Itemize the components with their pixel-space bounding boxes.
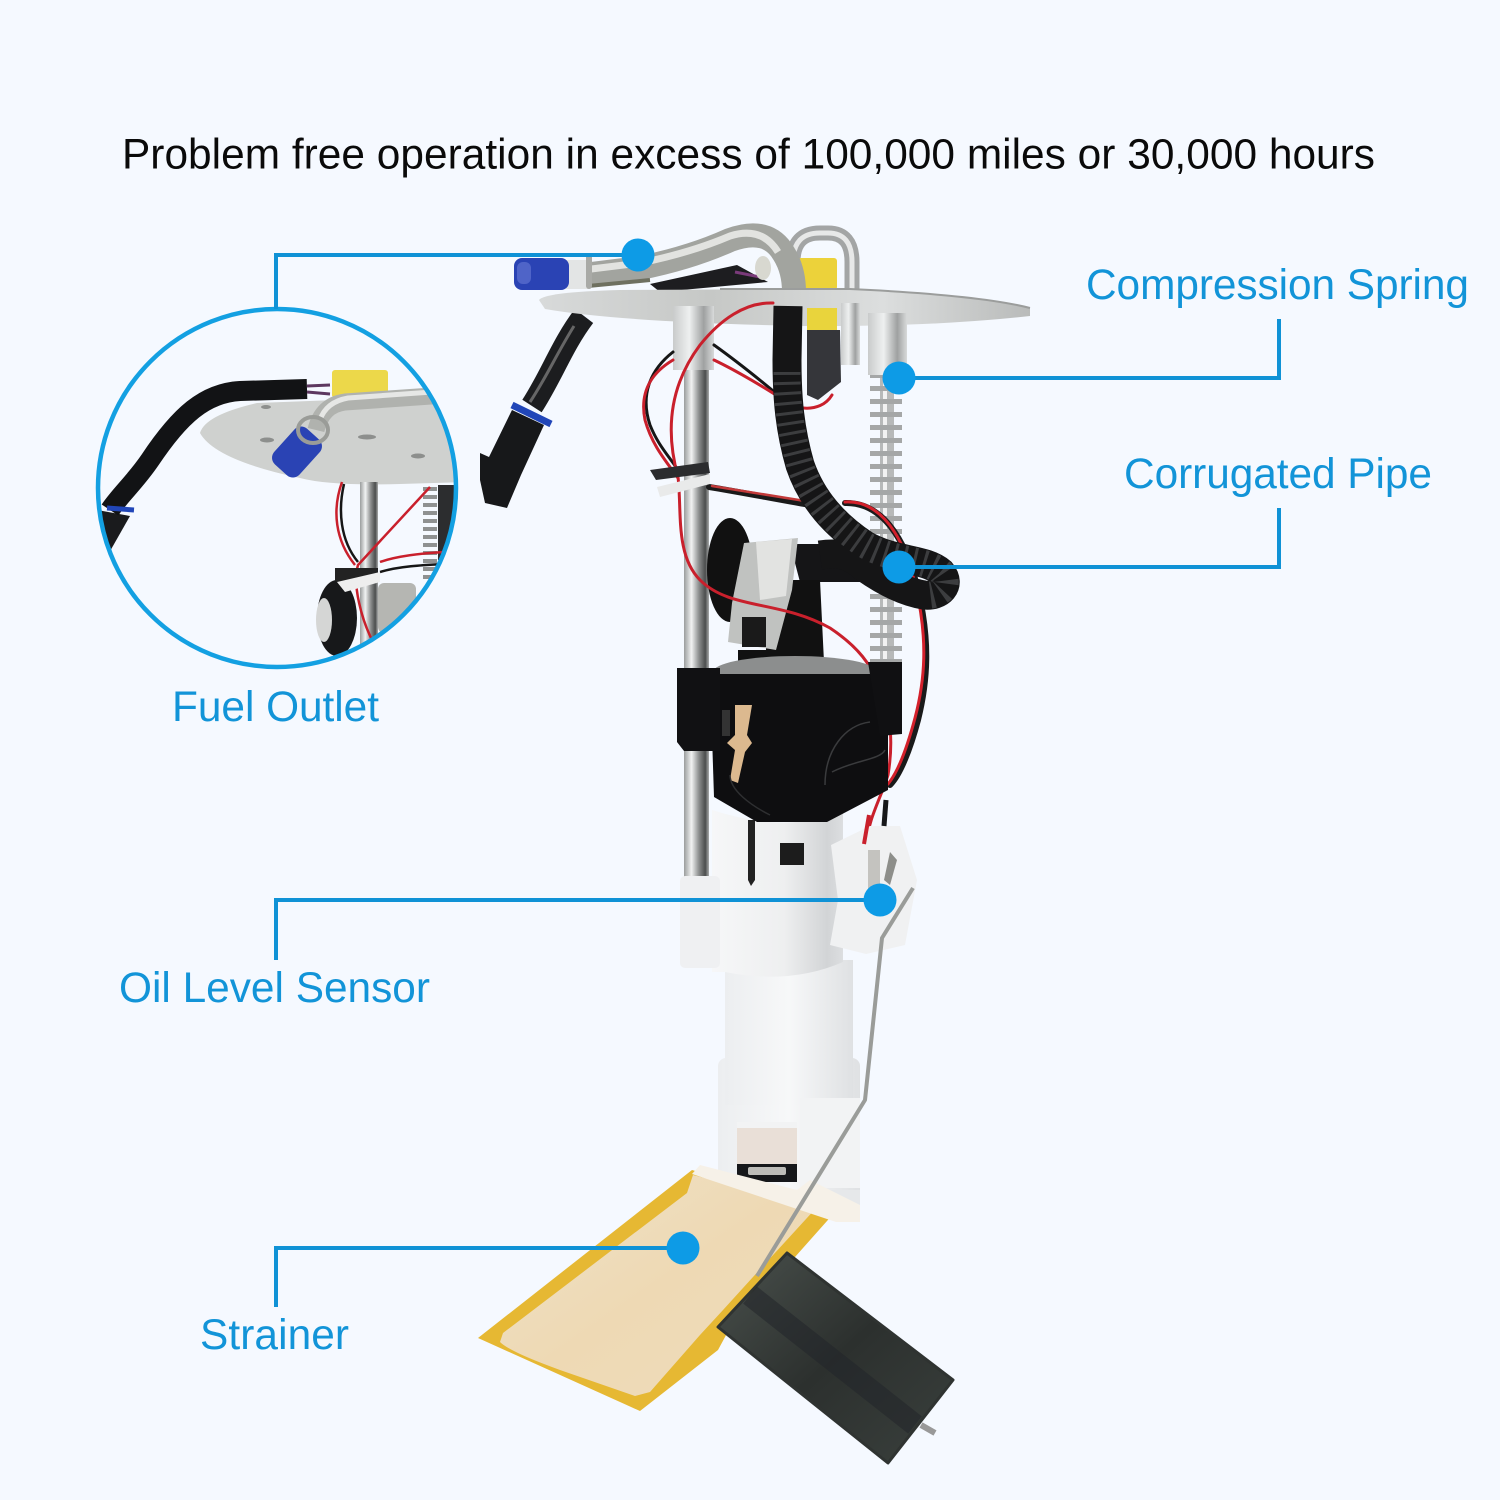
- label: corrugated pipe: Corrugated Pipe: [1124, 450, 1432, 497]
- leader line: [276, 255, 638, 309]
- leader line: [899, 508, 1279, 567]
- inset cable: [110, 389, 307, 510]
- callout: compression spring: [882, 319, 1279, 394]
- inset plate: [200, 400, 454, 484]
- leader line: [899, 319, 1279, 378]
- strainer: [478, 1165, 860, 1411]
- black pump module: [677, 656, 902, 822]
- inset cable tie: [335, 568, 378, 582]
- fuel outlet inset: [90, 309, 470, 667]
- marker dot: [882, 550, 916, 584]
- callout: corrugated pipe: [882, 508, 1279, 584]
- float arm: [757, 888, 913, 1276]
- white pump housing: [680, 810, 860, 1222]
- plate left pillar and rod: [673, 306, 714, 877]
- corrugated pipe: [787, 306, 945, 595]
- compression spring: [868, 313, 907, 663]
- inset connector: [102, 510, 130, 550]
- inset spring: [423, 487, 437, 580]
- pump head: [707, 518, 890, 662]
- wire bundle behind tube: [650, 265, 768, 292]
- mounting plate tubes: [514, 233, 852, 292]
- connector cable: [480, 316, 584, 508]
- marker dot: [882, 362, 916, 394]
- inset blue cap: [272, 426, 322, 478]
- fuel pump assembly: [478, 233, 1030, 1463]
- marker dot: [622, 238, 654, 272]
- leader line: [276, 900, 880, 960]
- inset rod: [360, 482, 378, 652]
- inset pump head: [317, 580, 357, 656]
- leader line: [276, 1248, 683, 1307]
- marker dot: [666, 1232, 700, 1264]
- inset ring: [98, 309, 456, 667]
- inset plate holes: [260, 405, 425, 458]
- inset fuel tube: [316, 394, 460, 430]
- under-plate connector: [807, 303, 860, 400]
- wires: [644, 303, 926, 842]
- marker dot: [864, 884, 896, 916]
- title: Problem free operation in excess of 100,000 miles or 30,000 hours: [122, 130, 1375, 178]
- cable tie: [650, 462, 710, 497]
- label: oil level sensor: Oil Level Sensor: [119, 964, 430, 1011]
- callout: oil level sensor: [276, 884, 896, 960]
- yellow connector: [798, 258, 837, 290]
- label: compression spring: Compression Spring: [1086, 261, 1469, 308]
- mounting plate: [539, 289, 1030, 326]
- inset yellow connector: [332, 370, 388, 398]
- blue cap: [514, 258, 569, 290]
- inset wires: [336, 482, 445, 640]
- callout: fuel outlet: [276, 238, 654, 309]
- label: fuel outlet: Fuel Outlet: [172, 683, 379, 730]
- callout: strainer: [276, 1232, 700, 1307]
- float: [718, 1253, 953, 1463]
- label: strainer: Strainer: [200, 1311, 349, 1358]
- oil level sensor: [830, 800, 917, 954]
